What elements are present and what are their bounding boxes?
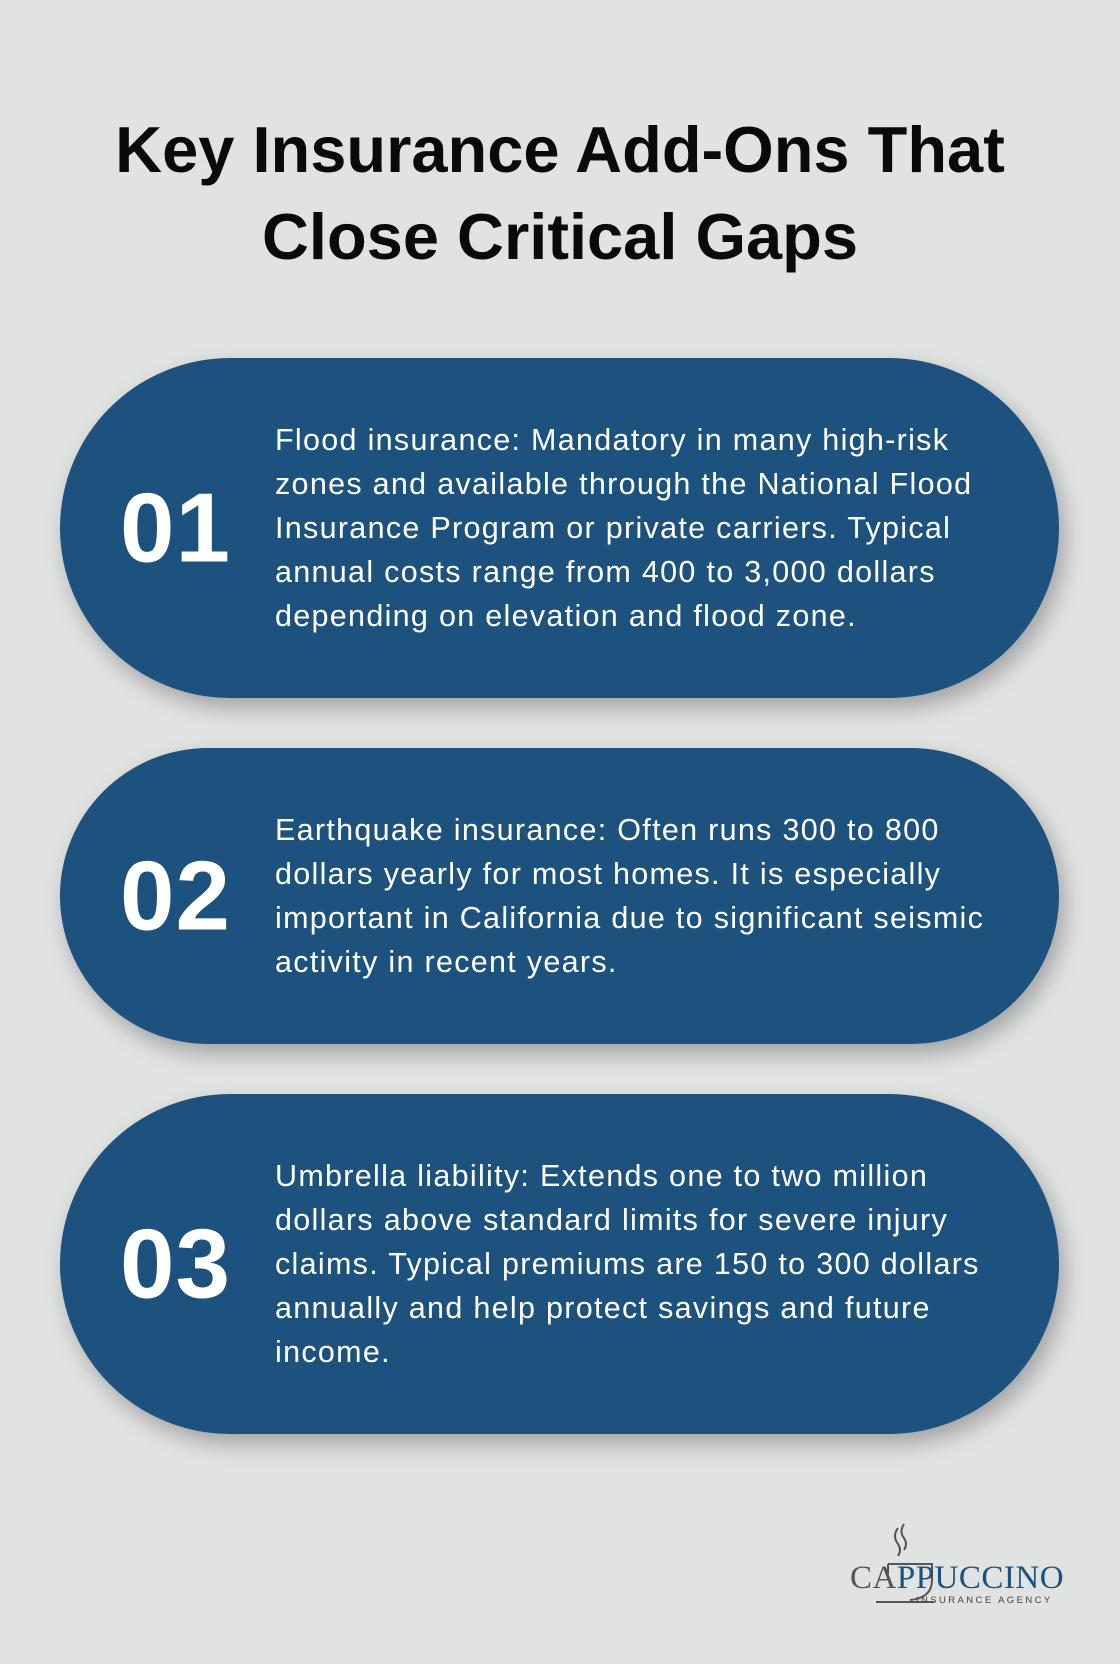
- text: umbrella: annually and help protect savings and future: [275, 1291, 931, 1325]
- text: umbrella: dollars above standard limits for severe injury: [275, 1203, 948, 1237]
- title: Key Insurance Add-Ons That: [115, 113, 1005, 186]
- text: umbrella: Umbrella liability: Extends one to two million: [275, 1159, 928, 1193]
- text: flood: [275, 423, 972, 633]
- title: [115, 113, 1005, 273]
- logo: [850, 1524, 1064, 1606]
- text: earthquake: Earthquake insurance: Often runs 300 to 800: [275, 813, 940, 847]
- title: Close Critical Gaps: [262, 200, 858, 273]
- text: umbrella: [275, 1159, 980, 1369]
- panel: flood insurance: [60, 358, 1059, 698]
- text: umbrella: claims. Typical premiums are 150 to 300 dollars: [275, 1247, 980, 1281]
- text: earthquake: important in California due to significant seismic: [275, 901, 984, 935]
- text: earthquake: [275, 813, 984, 979]
- text: flood: zones and available through the National Flood: [275, 467, 972, 501]
- text: earthquake: dollars yearly for most homes. It is especially: [275, 857, 941, 891]
- text: flood: depending on elevation and flood zone.: [275, 599, 857, 633]
- number 03: 03: [120, 1208, 231, 1318]
- logo: INSURANCE AGENCY: [916, 1595, 1053, 1606]
- number 01: 01: [120, 472, 231, 582]
- text: flood: annual costs range from 400 to 3,000 dollars: [275, 555, 936, 589]
- text: flood: Flood insurance: Mandatory in many high-risk: [275, 423, 949, 457]
- panel: earthquake insurance: [60, 748, 1059, 1044]
- logo text: CAPPUCCINO: [850, 1560, 1064, 1596]
- text: umbrella: income.: [275, 1335, 391, 1369]
- panel: umbrella liability: [60, 1094, 1059, 1434]
- number 02: 02: [120, 840, 231, 950]
- icon: cup: [876, 1524, 934, 1603]
- text: earthquake: activity in recent years.: [275, 945, 618, 979]
- text: flood: Insurance Program or private carriers. Typical: [275, 511, 951, 545]
